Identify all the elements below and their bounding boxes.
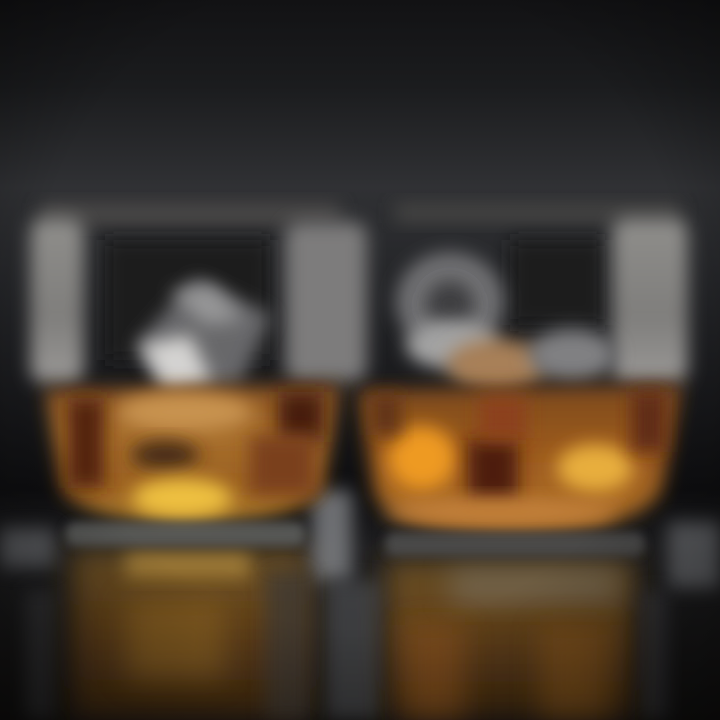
right glass bbox=[358, 203, 688, 556]
glass interior dark bbox=[105, 240, 270, 360]
left glass wall highlight bbox=[30, 218, 84, 383]
left glass bbox=[30, 203, 367, 546]
glass rim bbox=[40, 203, 340, 225]
ice cube bbox=[135, 278, 272, 390]
ice cubes bbox=[396, 252, 616, 391]
glass base bbox=[65, 522, 305, 546]
whisky bbox=[358, 385, 682, 532]
table reflections bbox=[0, 490, 720, 720]
right glass wall highlight bbox=[612, 218, 688, 383]
right glass wall highlight bbox=[285, 222, 367, 382]
glass base bbox=[385, 532, 645, 556]
whisky bbox=[45, 385, 340, 522]
glass rim bbox=[395, 203, 680, 223]
glass interior dark bbox=[510, 240, 605, 325]
